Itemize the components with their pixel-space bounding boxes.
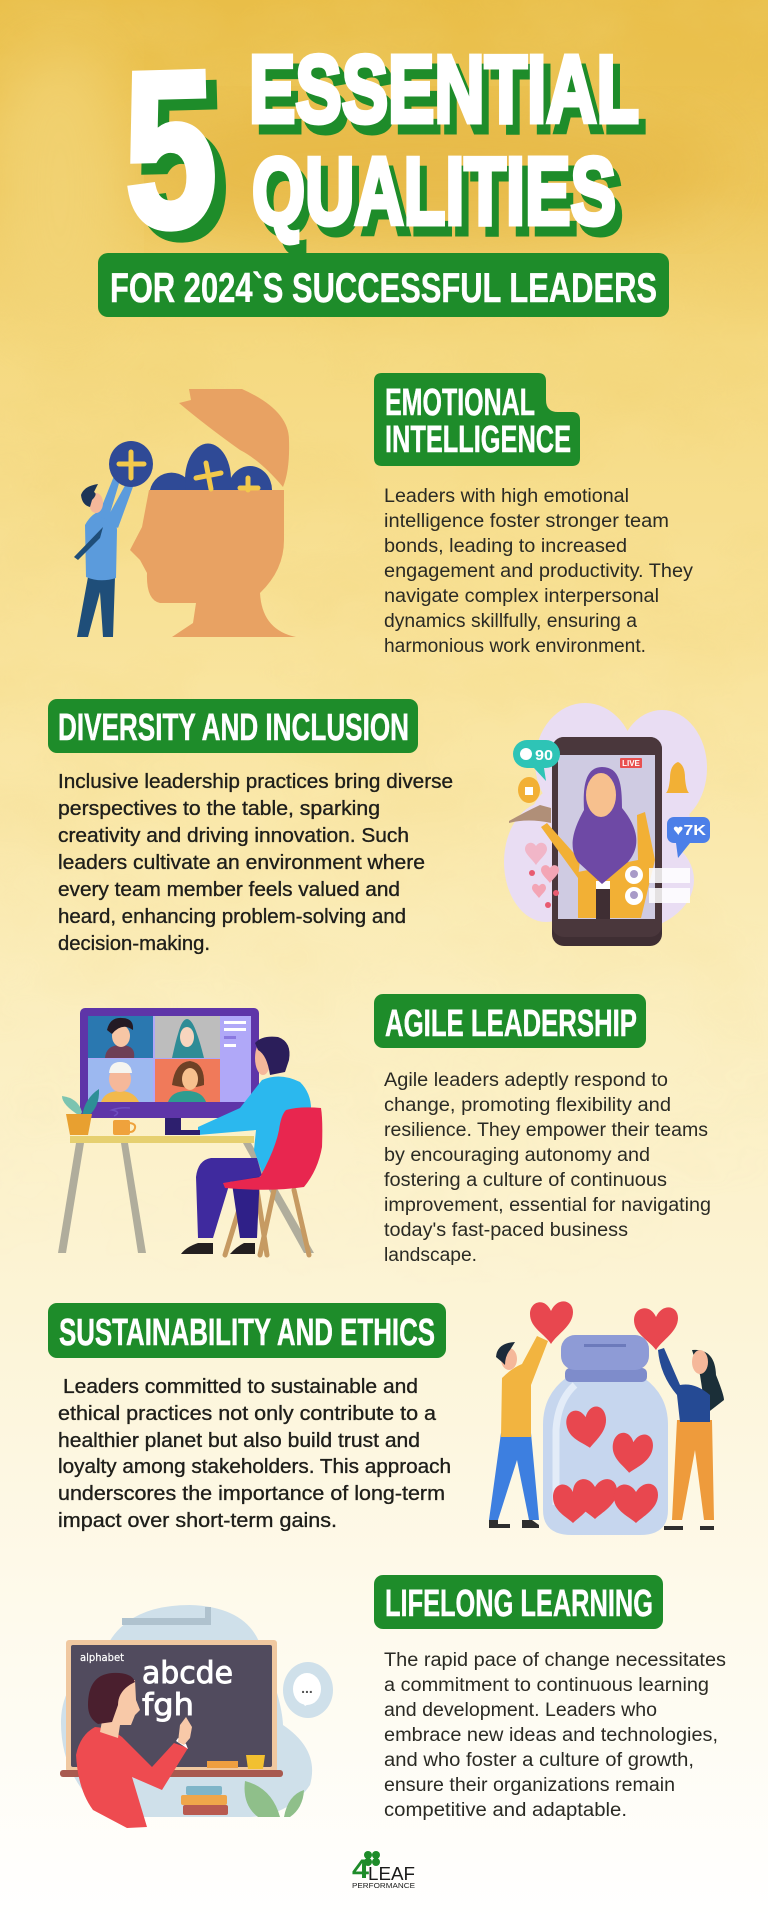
chair [223,1107,322,1190]
body text: Leaders committed to sustainable and [63,1376,418,1398]
lid of head [179,389,289,487]
heading badge [374,1575,663,1629]
icon: phone livestream illustration [504,703,710,946]
logo: 4 Leaf Performance: PERFORMANCE [352,1883,415,1890]
desk and legs [58,1136,314,1253]
title: 5 Essential Qualities [121,25,646,286]
body text: decision-making. [58,933,210,955]
body text: healthier planet but also build trust and [58,1430,420,1452]
body text: competitive and adaptable. [384,1800,627,1821]
body text: loyalty among stakeholders. This approach [58,1456,451,1478]
body text: Agile leaders adeptly respond to [384,1070,668,1091]
man holding heart [489,1301,573,1528]
body text [58,1376,451,1532]
phone body [552,737,662,946]
body text: Leaders with high emotional [384,486,629,507]
heading badge [48,699,418,753]
head [130,490,296,637]
heading badge [48,1303,446,1358]
background blob [61,1605,312,1817]
QUALITIES: QUALITIES [252,138,616,245]
like badge [518,777,540,803]
jar [543,1335,668,1535]
presenter [541,767,655,919]
shoe [509,805,551,823]
chalkboard text: alphabet [80,1651,125,1664]
body text: ethical practices not only contribute to a [58,1403,437,1425]
chalkboard text [80,1651,233,1723]
clover [364,1851,380,1866]
body text: change, promoting flexibility and [384,1095,671,1116]
body text: navigate complex interpersonal [384,586,659,607]
heading badge: DIVERSITY AND INCLUSION [58,707,409,749]
heading badge [374,373,580,466]
live tag: LIVE [622,759,641,768]
icon: teacher at chalkboard illustration [60,1605,333,1828]
bubble 7K: ♥7K [673,822,706,839]
chalkboard text: abcde [142,1656,233,1691]
body text: harmonious work environment. [384,636,646,657]
panel: sustainability and ethics [48,1303,451,1532]
numeral 5: 5 [121,25,219,275]
body text: impact over short-term gains. [58,1510,337,1532]
panel: lifelong learning [374,1575,726,1821]
body text: underscores the importance of long-term [58,1483,445,1505]
teacher [76,1673,192,1828]
books and leaf [181,1781,304,1817]
body text: landscape. [384,1245,477,1266]
lilac blobs [504,703,707,932]
body text: a commitment to continuous learning [384,1675,709,1696]
logo: 4 Leaf Performance [352,1851,415,1890]
body text: and development. Leaders who [384,1700,657,1721]
speech bubble [283,1662,333,1718]
panel: agile leadership [374,994,711,1266]
chair back legs [225,1190,309,1255]
chalkboard [60,1640,283,1777]
heading badge: INTELLIGENCE [385,419,571,461]
body text: every team member feels valued and [58,879,400,901]
body text: Inclusive leadership practices bring diverse [58,771,453,793]
body text: and who foster a culture of growth, [384,1750,694,1771]
bell [666,762,689,793]
subtitle badge [98,253,669,317]
body text: fostering a culture of continuous [384,1170,667,1191]
chalkboard text: fgh [142,1688,194,1723]
heading badge: SUSTAINABILITY AND ETHICS [59,1312,435,1354]
body text: intelligence foster stronger team [384,511,669,532]
numeral 5 shadow: 5 [132,36,231,286]
heading badge: AGILE LEADERSHIP [385,1003,637,1045]
plant and mug [62,1089,135,1135]
panel: diversity and inclusion [48,699,453,955]
icon: jar of hearts illustration [489,1301,724,1535]
body text: bonds, leading to increased [384,536,627,557]
body text: by encouraging autonomy and [384,1145,650,1166]
icon: head with coins illustration [74,389,296,637]
body text: creativity and driving innovation. Such [58,825,409,847]
body text: leaders cultivate an environment where [58,852,425,874]
bubble 90: 90 [535,747,553,764]
heading badge [374,994,646,1048]
body text: ensure their organizations remain [384,1775,675,1796]
bubble 7K [667,817,710,858]
hearts [525,843,559,908]
window [122,1607,211,1625]
bubble 90 [513,740,560,781]
seated person [172,1037,311,1254]
icon: video call at desk illustration [58,1008,322,1255]
logo: 4 Leaf Performance: 4 [352,1854,369,1884]
body text: embrace new ideas and technologies, [384,1725,718,1746]
body text: heard, enhancing problem-solving and [58,906,406,928]
body text [384,1650,726,1821]
body text [58,771,453,955]
body text: The rapid pace of change necessitates [384,1650,726,1671]
body text: perspectives to the table, sparking [58,798,380,820]
panel: emotional intelligence [374,373,694,657]
heading badge: EMOTIONAL [385,382,535,424]
speech bubble: ... [301,1680,313,1696]
logo: 4 Leaf Performance: LEAF [368,1864,415,1884]
monitor [80,1008,259,1135]
hearts in jar [553,1405,658,1523]
body text: improvement, essential for navigating [384,1195,711,1216]
body text: resilience. They empower their teams [384,1120,708,1141]
body text [384,1070,711,1266]
person placing coin [74,441,153,637]
woman holding heart [634,1307,724,1530]
body text: engagement and productivity. They [384,561,694,582]
body text: today's fast-paced business [384,1220,628,1241]
comment cards [625,866,690,905]
video call faces [101,1018,206,1102]
body text: dynamics skillfully, ensuring a [384,611,637,632]
coins in head [150,444,272,490]
phone screen [558,755,655,919]
QUALITIES shadow: QUALITIES [259,148,623,255]
body text [384,486,694,657]
